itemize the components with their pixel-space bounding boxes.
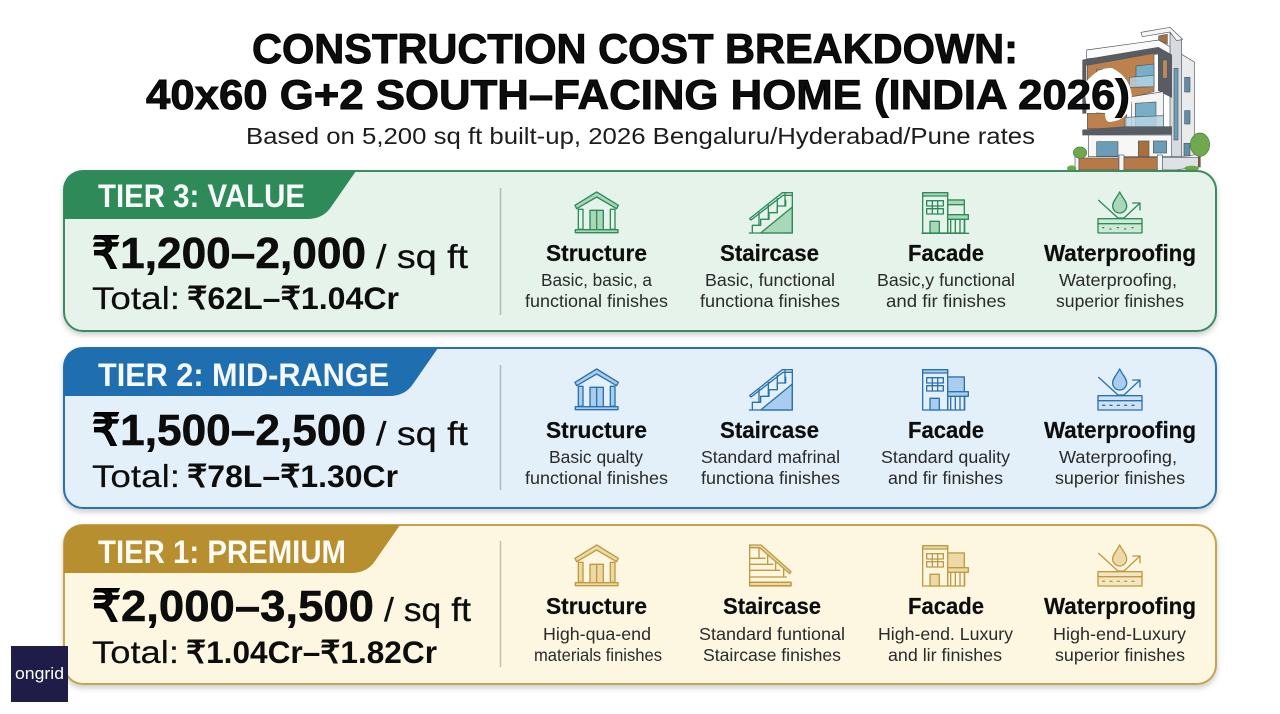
total: tier 2 bbox=[92, 458, 398, 494]
text: structure description: High-qua-end bbox=[543, 624, 651, 644]
tab label: tier 2: TIER 2: MID-RANGE bbox=[98, 357, 389, 393]
text: facade description: Basic,y functional bbox=[877, 270, 1015, 290]
title bbox=[146, 25, 1130, 118]
text: structure description: materials finishes bbox=[534, 645, 662, 665]
text: facade description bbox=[878, 624, 1013, 665]
text: structure description: functional finishes bbox=[525, 468, 668, 488]
icon: staircase bbox=[749, 193, 792, 233]
label: structure: Structure bbox=[546, 417, 647, 443]
icon: structure bbox=[575, 369, 618, 410]
item: waterproofing bbox=[1044, 192, 1196, 311]
tab: tier 1 bbox=[64, 525, 400, 573]
text: staircase description: Standard funtional bbox=[699, 624, 845, 644]
item: structure bbox=[534, 545, 662, 665]
label: facade: Facade bbox=[908, 593, 984, 619]
text: facade description bbox=[877, 270, 1015, 311]
price: tier 1: / sq ft bbox=[384, 591, 471, 628]
label: structure: Structure bbox=[546, 240, 647, 266]
text: waterproofing description: superior finishes bbox=[1055, 645, 1185, 665]
label: structure: Structure bbox=[546, 593, 647, 619]
label: staircase: Staircase bbox=[720, 240, 819, 266]
icon: facade bbox=[922, 193, 969, 233]
panel: tier 3 value bbox=[64, 171, 1216, 331]
text: staircase description: Basic, functional bbox=[705, 270, 835, 290]
price: tier 2: / sq ft bbox=[376, 415, 468, 452]
tab label: tier 1: TIER 1: PREMIUM bbox=[98, 534, 346, 570]
logo: ongrid: ongrid bbox=[15, 664, 64, 683]
item: staircase bbox=[701, 370, 840, 488]
text: staircase description: functiona finishes bbox=[701, 468, 840, 488]
total: tier 1: Total: bbox=[92, 634, 179, 670]
item: facade bbox=[881, 370, 1010, 488]
icon: waterproofing bbox=[1098, 192, 1142, 233]
icon: staircase bbox=[750, 545, 791, 586]
text: staircase description: Staircase finishes bbox=[703, 645, 841, 665]
title: 40x60 G+2 SOUTH–FACING HOME (INDIA 2026) bbox=[146, 71, 1130, 118]
tab label: tier 3: TIER 3: VALUE bbox=[98, 178, 305, 214]
title halo behind closing bracket bbox=[1085, 68, 1132, 122]
text: staircase description bbox=[701, 447, 840, 488]
text: facade description: and lir finishes bbox=[888, 645, 1002, 665]
label: facade: Facade bbox=[908, 417, 984, 443]
text: facade description: High-end. Luxury bbox=[878, 624, 1013, 644]
price: tier 2: ₹1,500–2,500 bbox=[92, 406, 366, 455]
label: waterproofing: Waterproofing bbox=[1044, 240, 1196, 266]
text: structure description bbox=[525, 447, 668, 488]
icon: facade bbox=[923, 546, 968, 586]
subtitle: Based on 5,200 sq ft built-up, 2026 Bengaluru/Hyderabad/Pune rates bbox=[246, 123, 1035, 149]
total: tier 3: Total: bbox=[92, 280, 180, 316]
tab: tier 3 bbox=[64, 171, 356, 219]
text: structure description: Basic, basic, a bbox=[541, 270, 652, 290]
label: staircase: Staircase bbox=[720, 417, 819, 443]
icon: facade bbox=[923, 370, 968, 410]
item: structure bbox=[525, 192, 668, 311]
price: tier 1: ₹2,000–3,500 bbox=[92, 582, 374, 631]
text: structure description bbox=[534, 624, 662, 665]
label: waterproofing: Waterproofing bbox=[1044, 417, 1196, 443]
logo: ongrid bbox=[11, 646, 68, 702]
text: facade description: and fir finishes bbox=[888, 468, 1003, 488]
item: waterproofing bbox=[1044, 369, 1196, 488]
tab: tier 2 bbox=[64, 348, 438, 396]
panel: tier 1 premium bbox=[64, 525, 1216, 684]
text: structure description: functional finishes bbox=[525, 291, 668, 311]
icon: structure bbox=[575, 192, 618, 233]
item: facade bbox=[878, 546, 1013, 665]
text: waterproofing description: Waterproofing, bbox=[1059, 270, 1177, 290]
total: tier 3: ₹62L–₹1.04Cr bbox=[187, 280, 399, 316]
panel: tier 2 mid-range bbox=[64, 348, 1216, 508]
item: waterproofing bbox=[1044, 545, 1196, 665]
text: waterproofing description: superior finishes bbox=[1056, 291, 1184, 311]
text: facade description: and fir finishes bbox=[886, 291, 1006, 311]
icon: structure bbox=[575, 545, 618, 586]
text: waterproofing description: superior finishes bbox=[1055, 468, 1185, 488]
illustration: three-storey house bbox=[1067, 27, 1210, 171]
title: CONSTRUCTION COST BREAKDOWN: bbox=[252, 25, 1018, 72]
total: tier 2: ₹78L–₹1.30Cr bbox=[187, 458, 398, 494]
text: staircase description: functiona finishes bbox=[700, 291, 840, 311]
text: structure description bbox=[525, 270, 668, 311]
text: waterproofing description bbox=[1055, 447, 1185, 488]
text: staircase description bbox=[699, 624, 845, 665]
text: waterproofing description: Waterproofing, bbox=[1059, 447, 1177, 467]
text: waterproofing description: High-end-Luxury bbox=[1053, 624, 1186, 644]
label: staircase: Staircase bbox=[723, 593, 821, 619]
item: staircase bbox=[699, 545, 845, 665]
item: facade bbox=[877, 193, 1015, 311]
item: staircase bbox=[700, 193, 840, 311]
text: waterproofing description bbox=[1053, 624, 1186, 665]
icon: waterproofing bbox=[1098, 545, 1142, 586]
total: tier 3 bbox=[92, 280, 399, 316]
total: tier 1: ₹1.04Cr–₹1.82Cr bbox=[186, 634, 437, 670]
price: tier 3: / sq ft bbox=[376, 238, 468, 275]
icon: staircase bbox=[749, 370, 792, 410]
item: structure bbox=[525, 369, 668, 488]
text: staircase description bbox=[700, 270, 840, 311]
text: structure description: Basic qualty bbox=[549, 447, 643, 467]
text: facade description bbox=[881, 447, 1010, 488]
total: tier 2: Total: bbox=[92, 458, 180, 494]
text: staircase description: Standard mafrinal bbox=[701, 447, 840, 467]
price: tier 3: ₹1,200–2,000 bbox=[92, 229, 366, 278]
label: facade: Facade bbox=[908, 240, 984, 266]
text: facade description: Standard quality bbox=[881, 447, 1010, 467]
text: waterproofing description bbox=[1056, 270, 1184, 311]
label: waterproofing: Waterproofing bbox=[1044, 593, 1196, 619]
icon: waterproofing bbox=[1098, 369, 1142, 410]
